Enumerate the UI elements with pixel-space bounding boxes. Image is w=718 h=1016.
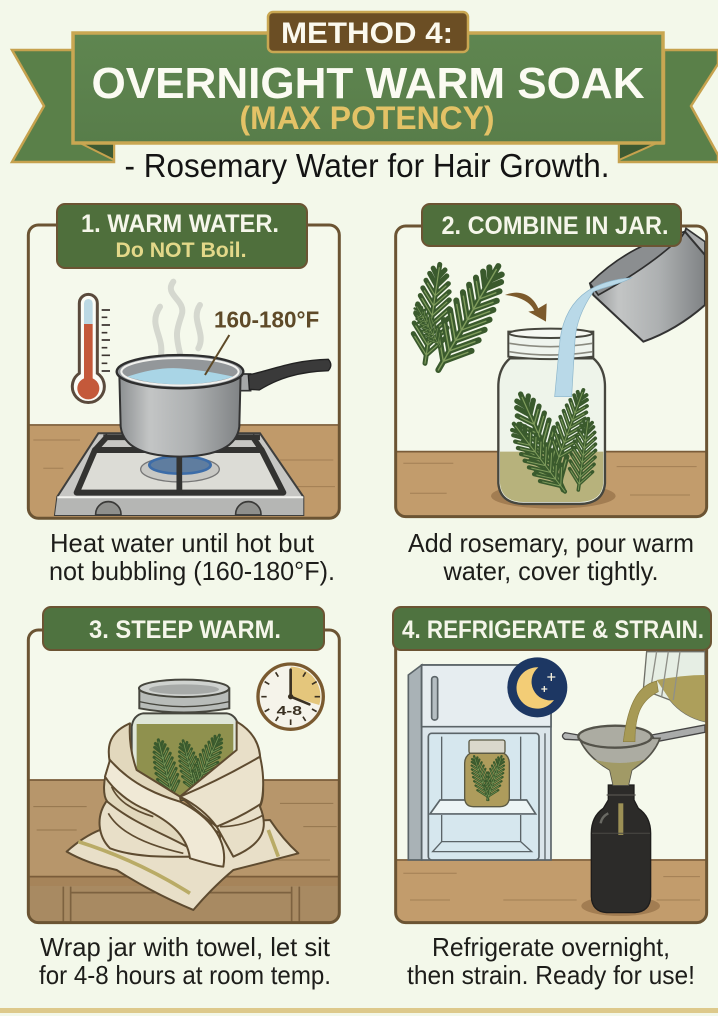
panel 1: warm water bbox=[28, 204, 339, 518]
panel 2: combine in jar bbox=[396, 204, 707, 517]
icon: saucepan bbox=[117, 335, 331, 457]
temperature label: 160-180°F bbox=[214, 306, 319, 332]
icon: small jar bbox=[465, 740, 509, 807]
icon: thermometer bbox=[72, 294, 110, 403]
water stream bbox=[555, 278, 632, 397]
icon: towel bbox=[67, 722, 298, 910]
liquid stream bbox=[623, 681, 658, 742]
heading label 1: 1. WARM WATER. bbox=[81, 210, 279, 238]
caption 3: Wrap jar with towel, let sit bbox=[40, 932, 331, 962]
icon: rosemary sprigs bbox=[409, 256, 516, 380]
title banner bbox=[12, 12, 718, 162]
right ribbon tail bbox=[619, 50, 718, 162]
method badge: METHOD 4: bbox=[281, 17, 453, 50]
left ribbon tail bbox=[12, 50, 114, 162]
icon: gas stove bbox=[55, 433, 303, 515]
steam bbox=[155, 282, 201, 360]
caption 3: for 4-8 hours at room temp. bbox=[39, 960, 331, 990]
main banner bbox=[73, 33, 663, 143]
icon: clock bbox=[258, 664, 323, 729]
heading label 3 bbox=[43, 607, 324, 650]
icon: strainer bbox=[562, 725, 705, 785]
illustration: towel-wrapped jar bbox=[28, 630, 339, 923]
illustration: pot on stove bbox=[28, 225, 339, 518]
panel 3: steep warm bbox=[28, 607, 339, 923]
jar shadow bbox=[491, 483, 616, 509]
icon: amber bottle bbox=[591, 785, 651, 913]
icon: refrigerator bbox=[408, 665, 551, 860]
main title: OVERNIGHT WARM SOAK bbox=[92, 59, 645, 108]
caption 4: Refrigerate overnight, bbox=[432, 932, 670, 962]
heading label 2: 2. COMBINE IN JAR. bbox=[442, 212, 668, 240]
caption 1: Heat water until hot but bbox=[50, 528, 315, 558]
heading label 4 bbox=[393, 607, 711, 650]
illustration: pouring into jar bbox=[396, 226, 707, 517]
heading label 2 bbox=[422, 204, 681, 246]
method badge bbox=[268, 12, 468, 52]
heading label 3: 3. STEEP WARM. bbox=[89, 616, 281, 644]
icon: jar with lid bbox=[132, 680, 238, 802]
icon: pouring saucepan bbox=[590, 228, 705, 342]
caption 2: water, cover tightly. bbox=[443, 556, 658, 586]
icon: shadow under bottle bbox=[581, 896, 660, 916]
illustration: fridge and straining bbox=[396, 630, 707, 923]
icon: pouring jar bbox=[643, 652, 705, 722]
tagline: - Rosemary Water for Hair Growth. bbox=[124, 147, 610, 184]
caption 2: Add rosemary, pour warm bbox=[408, 528, 694, 558]
heading label 1 bbox=[57, 204, 307, 268]
icon: clock: 4-8 bbox=[277, 703, 302, 718]
subtitle potency: (MAX POTENCY) bbox=[240, 100, 494, 136]
caption 1: not bubbling (160-180°F). bbox=[49, 556, 335, 586]
heading label 1: Do NOT Boil. bbox=[116, 239, 246, 262]
icon: mason jar bbox=[498, 329, 605, 504]
panel 4: refrigerate and strain bbox=[393, 607, 711, 923]
caption 4: then strain. Ready for use! bbox=[407, 960, 695, 990]
ribbon folds bbox=[80, 143, 657, 160]
arrow: into jar bbox=[505, 293, 547, 322]
icon: moon badge bbox=[507, 657, 567, 717]
bottom border bbox=[0, 1008, 718, 1013]
